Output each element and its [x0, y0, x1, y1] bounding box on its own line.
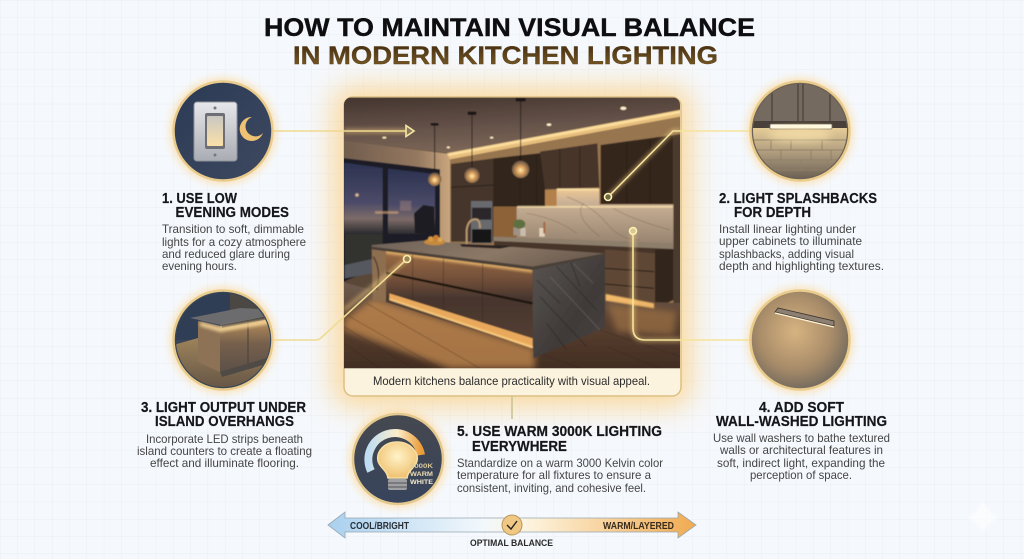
step 1 text: evening hours.: [162, 259, 237, 273]
balance scale arrow: COOL/BRIGHT: [350, 521, 409, 532]
step 2 text: upper cabinets to illuminate: [719, 234, 862, 248]
icon: dimmer switch and moon: [170, 78, 276, 184]
step 4 text: Use wall washers to bathe textured: [713, 431, 890, 445]
step 5 text: temperature for all fixtures to ensure a: [457, 468, 651, 482]
icon: warm light bulb with colour temperature arc: 3000K: [410, 463, 433, 470]
step 2 text: Install linear lighting under: [719, 222, 856, 236]
panel: kitchen photo with caption: [340, 97, 683, 396]
balance scale arrow: [328, 512, 696, 549]
caption: Modern kitchens balance practicality with visual appeal.: [373, 374, 650, 388]
step 2 text: depth and highlighting textures.: [719, 259, 884, 273]
connector 1: to ceiling with arrow: [273, 126, 414, 136]
balance scale arrow: WARM/LAYERED: [603, 521, 674, 532]
connector 5: caption to step five: [511, 396, 513, 419]
step 3 text: island counters to create a floating: [137, 444, 312, 458]
step 3 text: ISLAND OVERHANGS: [155, 414, 294, 430]
step 5 text: consistent, inviting, and cohesive feel.: [457, 481, 646, 495]
step 2 text: FOR DEPTH: [734, 205, 811, 221]
step 4 text: soft, indirect light, expanding the: [717, 456, 885, 470]
connector glows: [344, 131, 681, 340]
step 4 text: [713, 400, 890, 482]
title: [264, 14, 755, 70]
icon: under-cabinet linear light: [747, 78, 853, 184]
icon: warm light bulb with colour temperature arc: [349, 410, 447, 508]
connector 2: to splashback: [604, 131, 750, 200]
step 5 text: 5. USE WARM 3000K LIGHTING: [457, 424, 662, 440]
step 2 text: splashbacks, adding visual: [719, 247, 854, 261]
step 5 text: Standardize on a warm 3000 Kelvin color: [457, 456, 663, 470]
balance scale arrow: OPTIMAL BALANCE: [470, 538, 553, 549]
icon: warm light bulb with colour temperature arc: WHITE: [410, 479, 434, 486]
step 1 text: Transition to soft, dimmable: [162, 222, 304, 236]
step 3 text: 3. LIGHT OUTPUT UNDER: [141, 400, 306, 416]
step 1 text: lights for a cozy atmosphere: [162, 235, 306, 249]
step 1 text: EVENING MODES: [176, 205, 289, 221]
step 4 text: walls or architectural features in: [719, 443, 883, 457]
step 3 text: effect and illuminate flooring.: [150, 456, 299, 470]
step 3 text: Incorporate LED strips beneath: [146, 432, 303, 446]
title: HOW TO MAINTAIN VISUAL BALANCE: [264, 14, 755, 42]
step 2 text: 2. LIGHT SPLASHBACKS: [719, 191, 877, 207]
title: IN MODERN KITCHEN LIGHTING: [293, 42, 718, 70]
icon: warm light bulb with colour temperature arc: WARM: [410, 471, 433, 478]
connector 4: to wall: [630, 228, 750, 340]
step 2 text: [719, 191, 884, 273]
sparkle mark: [966, 498, 999, 534]
step 4 text: WALL-WASHED LIGHTING: [716, 414, 887, 430]
step 5 text: EVERYWHERE: [472, 439, 567, 455]
step 1 text: and reduced glare during: [162, 247, 290, 261]
step 1 text: 1. USE LOW: [162, 191, 237, 207]
step 1 text: [162, 191, 306, 273]
icon: island overhang: [170, 287, 280, 395]
step 5 text: [457, 424, 663, 495]
icon: check badge: [502, 515, 522, 535]
step 3 text: [137, 400, 312, 470]
step 4 text: perception of space.: [750, 468, 852, 482]
connector 3: to island overhang: [273, 256, 410, 340]
step 4 text: 4. ADD SOFT: [759, 400, 844, 416]
kitchen scene illustration: [340, 97, 683, 370]
icon: wall washer: [747, 287, 853, 393]
warm glow behind photo: [332, 86, 692, 408]
